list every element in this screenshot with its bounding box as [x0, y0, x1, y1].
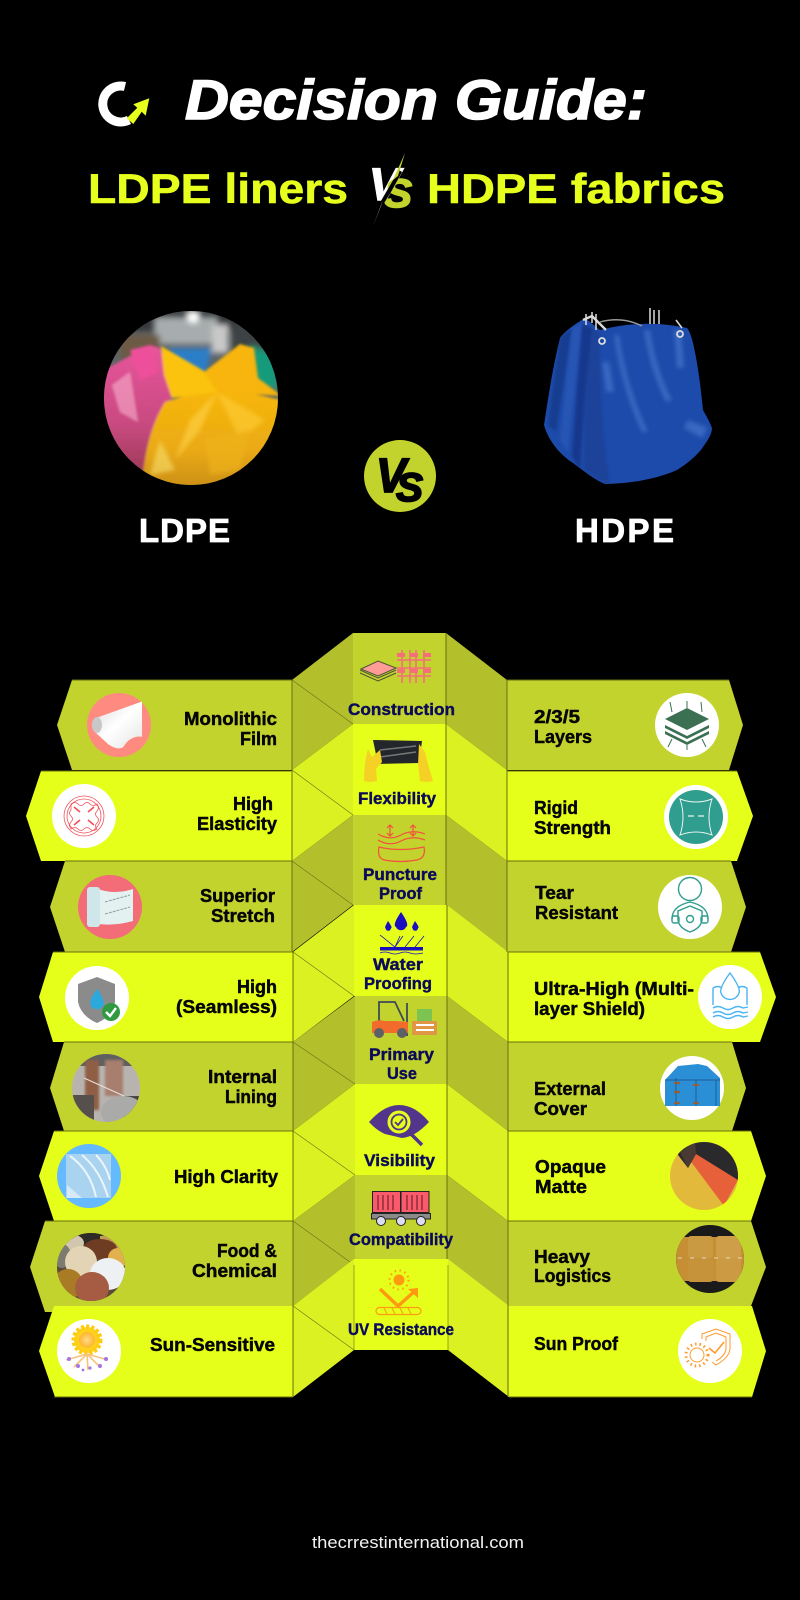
label: Compatibility: Compatibility — [349, 1231, 454, 1249]
left row 4: High (Seamless) — [39, 952, 293, 1042]
image: HDPE blue curtain — [540, 308, 720, 490]
icon: water drop on book — [698, 965, 762, 1029]
center 3: Puncture Proof — [363, 825, 437, 903]
text: Ultra-High Multi-layer Shield: layer Shield) — [534, 999, 645, 1019]
label: Puncture Proof: Proof — [379, 885, 422, 903]
text: Heavy Logistics: Heavy — [534, 1247, 590, 1267]
badge: center VS: V — [376, 450, 410, 503]
right row 4: Ultra-High Multi-layer Shield — [508, 952, 776, 1042]
left row 5: Internal Lining — [50, 1042, 293, 1131]
icon: UV reflection arrow — [376, 1270, 421, 1314]
divider strokes — [41, 633, 760, 1397]
center 1: Construction — [348, 650, 455, 719]
text: High (Seamless): (Seamless) — [176, 997, 277, 1017]
icon: VS lightning badge — [369, 153, 412, 226]
icon: VS lightning badge: V — [369, 159, 404, 210]
text: High Elasticity — [197, 794, 277, 834]
center column backgrounds and folds — [292, 633, 509, 1397]
right row 3: Tear Resistant — [507, 861, 746, 952]
left row 1: Monolithic Film — [57, 680, 292, 770]
right row 2: Rigid Strength — [507, 771, 753, 861]
subtitle: LDPE liners: LDPE liners — [88, 165, 348, 212]
center 5: Primary Use — [369, 1002, 437, 1083]
label: HDPE: HDPE — [575, 512, 674, 549]
comparison chart — [26, 633, 776, 1397]
text: Rigid Strength: Rigid — [534, 798, 578, 818]
text: High (Seamless) — [176, 977, 277, 1017]
center 4: Water Proofing — [364, 912, 432, 993]
text: Internal Lining: Lining — [225, 1087, 277, 1107]
label: Puncture Proof — [363, 866, 437, 903]
text: Tear Resistant: Resistant — [535, 903, 618, 923]
icon: blue tarp cover — [660, 1056, 724, 1120]
text: Monolithic Film: Film — [240, 729, 277, 749]
text: External Cover — [534, 1079, 606, 1119]
label: Puncture Proof: Puncture — [363, 866, 437, 884]
text: Opaque Matte — [535, 1157, 606, 1197]
left row 2: High Elasticity — [26, 771, 292, 861]
label: Construction: Construction — [348, 701, 455, 719]
icon: opaque fabric photo — [670, 1142, 738, 1210]
icon: logo arrow — [103, 86, 149, 124]
icon: container wagon — [372, 1192, 430, 1226]
text: Tear Resistant: Tear — [535, 883, 574, 903]
label: Primary Use: Primary — [369, 1046, 435, 1064]
text: 2/3/5 Layers: Layers — [534, 727, 592, 747]
icon: hands stretching black film — [364, 740, 433, 782]
text: Food and Chemical: Food & — [217, 1241, 277, 1261]
icon: sun and shield — [678, 1319, 742, 1383]
label: Water Proofing — [364, 956, 432, 993]
icon: stretch film roll — [78, 875, 142, 939]
left row 8: Sun-Sensitive — [39, 1306, 293, 1397]
icon: rigid sheet — [664, 785, 728, 849]
label: LDPE: LDPE — [139, 512, 230, 549]
left row 6: High Clarity — [39, 1131, 293, 1221]
text: Food and Chemical: Chemical — [192, 1261, 277, 1281]
center 6: Visibility — [364, 1105, 436, 1170]
badge: center VS — [364, 440, 436, 512]
label: Visibility: Visibility — [364, 1152, 436, 1170]
icon: liner photo — [72, 1054, 140, 1122]
icon: rolled film — [87, 693, 151, 757]
icon: bulk bags photo — [676, 1225, 744, 1293]
icon: water drops and repelling surface — [380, 912, 424, 954]
text: Ultra-High Multi-layer Shield — [534, 979, 694, 1019]
icon: sun with particles — [57, 1319, 121, 1383]
label: Water Proofing: Proofing — [364, 975, 432, 993]
title: Decision Guide: Decision Guide: — [185, 68, 647, 131]
icon: eye with magnifier — [369, 1105, 429, 1145]
text: Internal Lining: Internal — [208, 1067, 277, 1087]
text: Sun-Sensitive: Sun-Sensitive — [150, 1335, 275, 1355]
label: Flexibility: Flexibility — [358, 790, 437, 808]
text: Rigid Strength — [534, 798, 611, 838]
left row 3: Superior Stretch — [50, 861, 292, 952]
text: Superior Stretch — [200, 886, 275, 926]
text: High Clarity: High Clarity — [174, 1167, 278, 1187]
text: High Elasticity: High — [233, 794, 273, 814]
text: Monolithic Film — [184, 709, 277, 749]
text: Superior Stretch: Stretch — [211, 906, 275, 926]
badge: center VS: S — [396, 466, 423, 510]
icon: elastic square — [52, 784, 116, 848]
text: Food and Chemical — [192, 1241, 277, 1281]
text: Tear Resistant — [535, 883, 618, 923]
icon: layered fabric — [655, 693, 719, 757]
icon: puncture layers — [378, 825, 425, 862]
subtitle: HDPE fabrics: HDPE fabrics — [427, 165, 725, 212]
text: 2/3/5 Layers: 2/3/5 — [534, 707, 580, 727]
icon: forklift — [372, 1002, 437, 1038]
label: UV Resistance: UV Resistance — [348, 1321, 454, 1339]
image: LDPE coloured bags — [100, 311, 282, 492]
center 7: Compatibility — [349, 1192, 454, 1249]
text: Monolithic Film: Monolithic — [184, 709, 277, 729]
center 8: UV Resistance — [348, 1270, 454, 1339]
icon: person with shield — [658, 875, 722, 939]
text: Heavy Logistics: Logistics — [534, 1266, 611, 1286]
icon: shield with water drop — [65, 966, 129, 1030]
text: Heavy Logistics — [534, 1247, 611, 1286]
text: Opaque Matte: Opaque — [535, 1157, 606, 1177]
icon: film layers and woven fabric — [360, 650, 431, 683]
label: Primary Use: Use — [387, 1065, 417, 1083]
text: High (Seamless): High — [237, 977, 277, 997]
right row 5: External Cover — [508, 1042, 746, 1131]
icon: clear bag — [57, 1144, 121, 1208]
footer: website: thecrrestinternational.com — [312, 1533, 524, 1552]
label: Primary Use — [369, 1046, 435, 1083]
text: Superior Stretch: Superior — [200, 886, 275, 906]
icon: food sacks photo — [57, 1233, 125, 1301]
text: External Cover: Cover — [534, 1099, 587, 1119]
text: Sun Proof: Sun Proof — [534, 1334, 619, 1354]
label: Water Proofing: Water — [373, 956, 424, 974]
icon: VS lightning badge: S — [384, 172, 412, 216]
text: Internal Lining — [208, 1067, 277, 1107]
center 2: Flexibility — [358, 740, 437, 808]
right row 6: Opaque Matte — [508, 1131, 766, 1221]
text: High Elasticity: Elasticity — [197, 814, 277, 834]
left row 7: Food and Chemical — [30, 1221, 293, 1312]
text: Rigid Strength: Strength — [534, 818, 611, 838]
right row 8: Sun Proof — [509, 1306, 766, 1397]
text: Opaque Matte: Matte — [535, 1177, 587, 1197]
right row 7: Heavy Logistics — [508, 1221, 766, 1306]
right row 1: 2/3/5 Layers — [507, 680, 743, 770]
text: External Cover: External — [534, 1079, 606, 1099]
text: Ultra-High Multi-layer Shield: Ultra-High (Multi- — [534, 979, 694, 999]
text: 2/3/5 Layers — [534, 707, 592, 747]
